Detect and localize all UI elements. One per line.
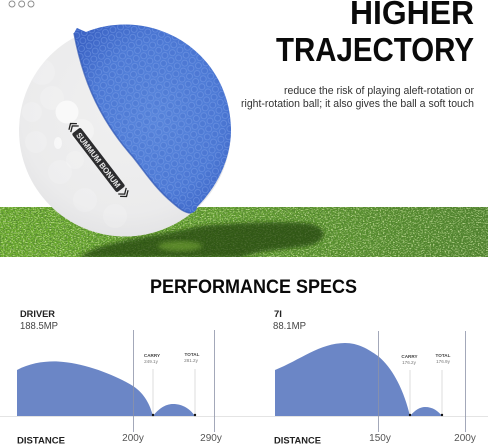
7 iron total marker [436,353,451,416]
driver trajectory shape [17,361,195,416]
heading: performance specs: PERFORMANCE SPECS [150,276,357,298]
shell dimple highlights [54,100,78,149]
description text [241,85,474,110]
7 iron total marker: TOTAL [436,353,451,358]
golf ball [19,24,231,236]
driver heading: 188.5MP [20,321,58,332]
window dots icon [9,1,34,7]
driver distance axis: 290y [200,433,222,444]
7 iron carry marker: 176.2y [402,360,417,365]
7 iron carry marker: CARRY [401,354,418,359]
brand band: SUMMUM BONUM: SUMMUM BONUM [74,131,122,190]
brand band: SUMMUM BONUM [66,120,131,200]
driver carry marker [144,353,160,416]
driver carry marker: 249.1y [144,359,159,364]
driver total marker: TOTAL [185,352,200,357]
driver heading: DRIVER [20,309,55,320]
driver total marker: 281.2y [184,358,199,363]
7 iron distance axis: 150y [369,433,391,444]
7 iron heading: 7I [274,309,282,320]
driver distance axis [17,433,222,444]
panel: driver chart [17,309,222,444]
7 iron total marker: 176.9y [436,359,451,364]
grass strip [0,207,488,258]
7 iron distance axis: 200y [454,433,476,444]
7 iron distance markers [378,331,466,432]
panel: 7 iron chart [273,309,476,444]
7 iron heading: 88.1MP [273,321,306,332]
description text: right-rotation ball; it also gives the ball a soft touch [241,98,474,110]
driver distance markers [134,330,214,432]
7 iron carry marker [401,354,418,416]
7 iron distance axis [274,433,476,444]
7 iron trajectory shape [275,343,442,416]
description text: reduce the risk of playing aleft-rotation or [284,85,474,97]
white cover shell [19,24,231,236]
7 iron heading [273,309,306,332]
baseline rule [0,416,488,418]
driver heading [20,309,58,332]
blue inner hemisphere [74,24,231,213]
driver distance axis: 200y [122,433,144,444]
title: HIGHER TRAJECTORY [276,0,474,69]
driver total marker [184,352,200,416]
ball shadow on grass [78,222,324,258]
driver carry marker: CARRY [144,353,160,358]
